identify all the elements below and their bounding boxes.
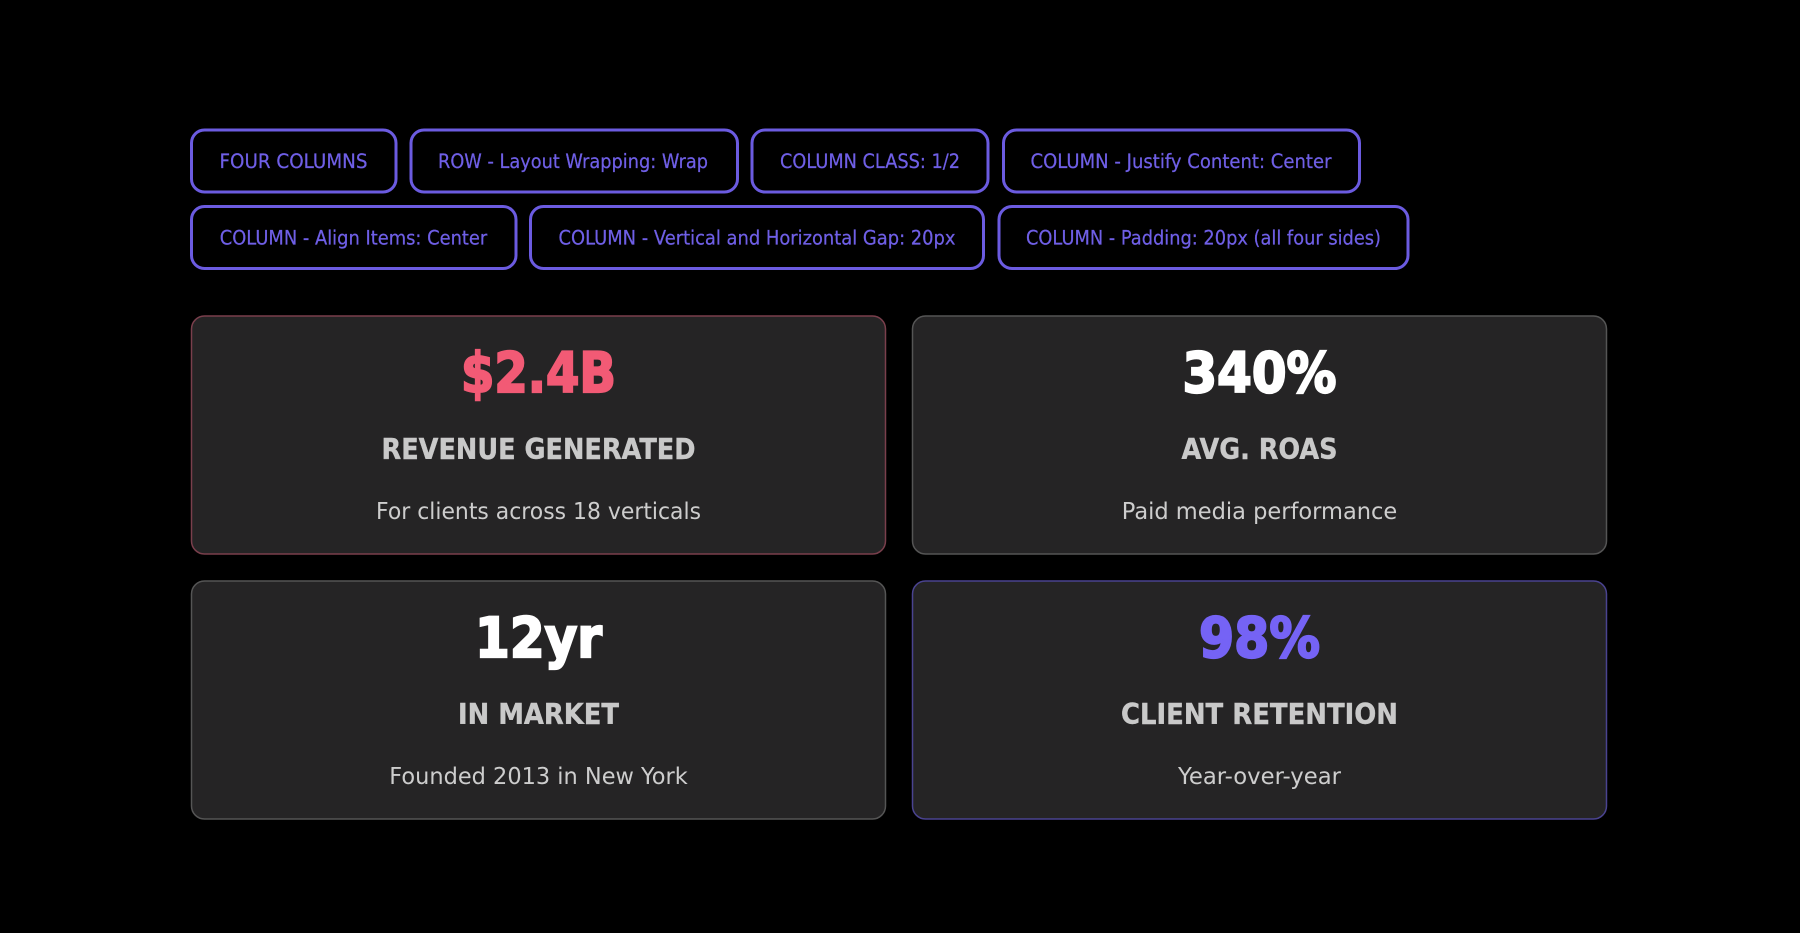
stat note: revenue: For clients across 18 verticals bbox=[376, 497, 701, 525]
tag: align items: COLUMN - Align Items: Center bbox=[220, 226, 488, 250]
tag: padding bbox=[999, 206, 1408, 268]
tag: column class: COLUMN CLASS: 1/2 bbox=[780, 150, 960, 173]
tag: justify content bbox=[1004, 130, 1360, 192]
panel: years in market bbox=[192, 581, 886, 819]
stat label: years: IN MARKET bbox=[458, 698, 619, 731]
panel: revenue generated bbox=[192, 316, 886, 554]
panel: average roas bbox=[912, 316, 1606, 554]
stat value: revenue: $2.4B bbox=[461, 341, 616, 405]
stat value: years: 12yr bbox=[475, 606, 602, 670]
tag: padding: COLUMN - Padding: 20px (all four sides) bbox=[1026, 226, 1381, 250]
stat label: retention: CLIENT RETENTION bbox=[1121, 698, 1398, 731]
tag row 2 bbox=[192, 206, 1408, 268]
panel: client retention bbox=[912, 581, 1606, 819]
tag: gap bbox=[530, 206, 984, 268]
stat value: retention: 98% bbox=[1199, 606, 1320, 670]
tag: align items bbox=[192, 206, 516, 268]
stat value: roas: 340% bbox=[1182, 341, 1336, 405]
tag: row layout wrapping: ROW - Layout Wrapping: Wrap bbox=[438, 150, 708, 173]
tag row 1 bbox=[192, 130, 1360, 192]
stat note: years: Founded 2013 in New York bbox=[389, 762, 688, 790]
tag: four columns: FOUR COLUMNS bbox=[220, 150, 368, 173]
tag: column class bbox=[752, 130, 988, 192]
stat label: roas: AVG. ROAS bbox=[1182, 433, 1338, 466]
stat label: revenue: REVENUE GENERATED bbox=[382, 433, 696, 466]
tag: gap: COLUMN - Vertical and Horizontal Gap: 20px bbox=[558, 226, 956, 250]
tag: row layout wrapping bbox=[411, 130, 738, 192]
stat note: roas: Paid media performance bbox=[1122, 497, 1397, 525]
tag: four columns bbox=[192, 130, 396, 192]
stat note: retention: Year-over-year bbox=[1177, 762, 1341, 790]
tag: justify content: COLUMN - Justify Content: Center bbox=[1030, 150, 1332, 173]
